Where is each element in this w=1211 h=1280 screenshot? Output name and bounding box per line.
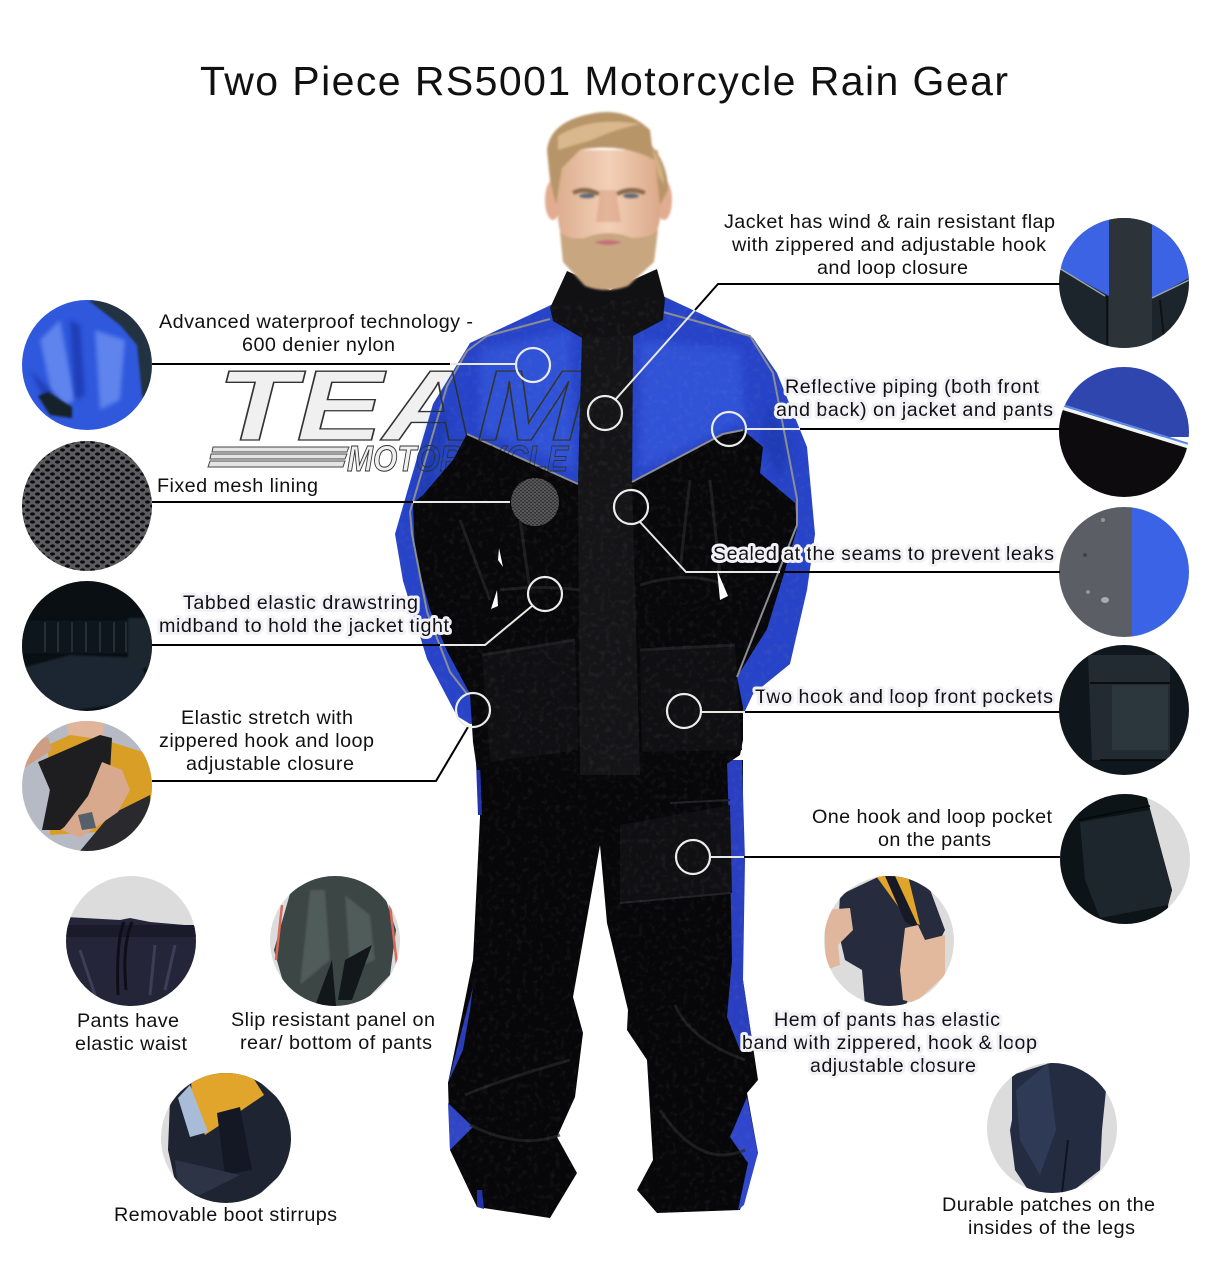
label [159,707,374,775]
rain speckle texture [390,270,820,1220]
label: Durable patches on the [942,1194,1155,1216]
label: midband to hold the jacket tight [159,615,450,637]
marker ring [614,490,648,524]
callout: jacket flap [588,211,1189,430]
thumbnail: pocket [1059,645,1189,775]
marker ring [528,577,562,611]
label: adjustable closure [186,753,354,775]
thumbnail: hands opening cuff [22,721,152,851]
jacket [395,269,815,782]
thumbnail: flap [1059,218,1189,348]
callout: reflective piping [712,367,1189,497]
callout: sealed seams [614,490,1189,637]
callout: tabbed elastic drawstring [22,577,562,712]
jacket collar [550,269,665,338]
label: zippered hook and loop [159,730,374,752]
thumbnail: hem with hands [824,876,954,1006]
label: band with zippered, hook & loop [742,1032,1037,1054]
hair [547,112,668,205]
label: elastic waist [75,1033,188,1055]
pants [448,760,758,1218]
label [159,311,473,356]
label: Tabbed elastic drawstring [183,592,418,614]
marker ring [456,693,490,727]
label: with zippered and adjustable hook [731,234,1046,256]
label: Hem of pants has elastic [774,1009,1000,1031]
logo stripes [208,447,349,467]
mesh lining patch on jacket [511,478,559,526]
label: rear/ bottom of pants [240,1032,432,1054]
label: Jacket has wind & rain resistant flap [724,211,1055,233]
label: Pants have [77,1010,179,1032]
marker ring [676,840,710,874]
connector line [800,428,1060,430]
marker ring [712,412,746,446]
callout: hem of pants [742,876,1037,1077]
logo subtitle: MOTORCYCLE [347,438,569,479]
connector line [780,571,1060,573]
thumbnail: pants pocket [1060,794,1191,925]
callout: elastic stretch closure [22,693,490,851]
callout: pants elastic waist [66,876,196,1055]
connector line [152,363,450,365]
label [812,806,1052,851]
marker ring [516,348,550,382]
label [159,592,450,637]
label [742,1009,1037,1077]
label: Advanced waterproof technology - [159,311,473,333]
thumbnail: boot stirrup [161,1073,291,1203]
label [724,211,1055,279]
logo wordmark: TEAM [217,350,588,462]
label: and back) on jacket and pants [776,399,1053,421]
label: 600 denier nylon [242,334,395,356]
reflective piping [410,312,797,694]
label: and loop closure [817,257,968,279]
thumbnail: piping [1059,367,1189,497]
callout: removable boot stirrups [114,1073,337,1226]
callout: pants pocket [676,794,1191,925]
rider wearing two piece rain gear [390,112,820,1220]
thumbnail: blue nylon [22,300,152,430]
label [75,1010,188,1055]
marker ring [588,396,622,430]
label: Two hook and loop front pockets [755,686,1053,708]
label [231,1009,435,1054]
label: insides of the legs [968,1217,1135,1239]
thumbnail: inner legs [987,1063,1117,1193]
label [942,1194,1155,1239]
thumbnail: rear of pants [270,876,400,1006]
thumbnail: elastic midband [22,581,152,712]
connector line [744,856,1060,858]
title: Two Piece RS5001 Motorcycle Rain Gear [200,58,1008,104]
label: Slip resistant panel on [231,1009,435,1031]
connector line [152,644,440,646]
label: on the pants [878,829,991,851]
callout: fixed mesh lining [22,441,510,571]
watermark logo: TEAM Motorcycle [208,350,588,479]
connector line [695,284,1060,310]
head [545,112,672,290]
label: Elastic stretch with [181,707,353,729]
connector line [152,501,413,503]
thumbnail: seam with droplets [1059,507,1189,637]
label [776,376,1053,421]
connector line [745,711,1060,713]
marker ring [667,694,701,728]
callout: slip resistant panel [231,876,435,1054]
label: Reflective piping (both front [785,376,1040,398]
label: adjustable closure [810,1055,976,1077]
label: Fixed mesh lining [157,475,318,497]
label: One hook and loop pocket [812,806,1052,828]
callout: front pockets [667,645,1189,775]
callout: advanced waterproof technology [22,300,550,430]
jacket black body and lower section [413,336,797,782]
callout: durable patches [942,1063,1155,1239]
hand gaps [491,548,728,609]
label: Sealed at the seams to prevent leaks [713,543,1054,565]
connector line [152,727,468,781]
thumbnail: waistband [66,876,196,1006]
label: Removable boot stirrups [114,1204,337,1226]
thumbnail: mesh [22,441,152,571]
